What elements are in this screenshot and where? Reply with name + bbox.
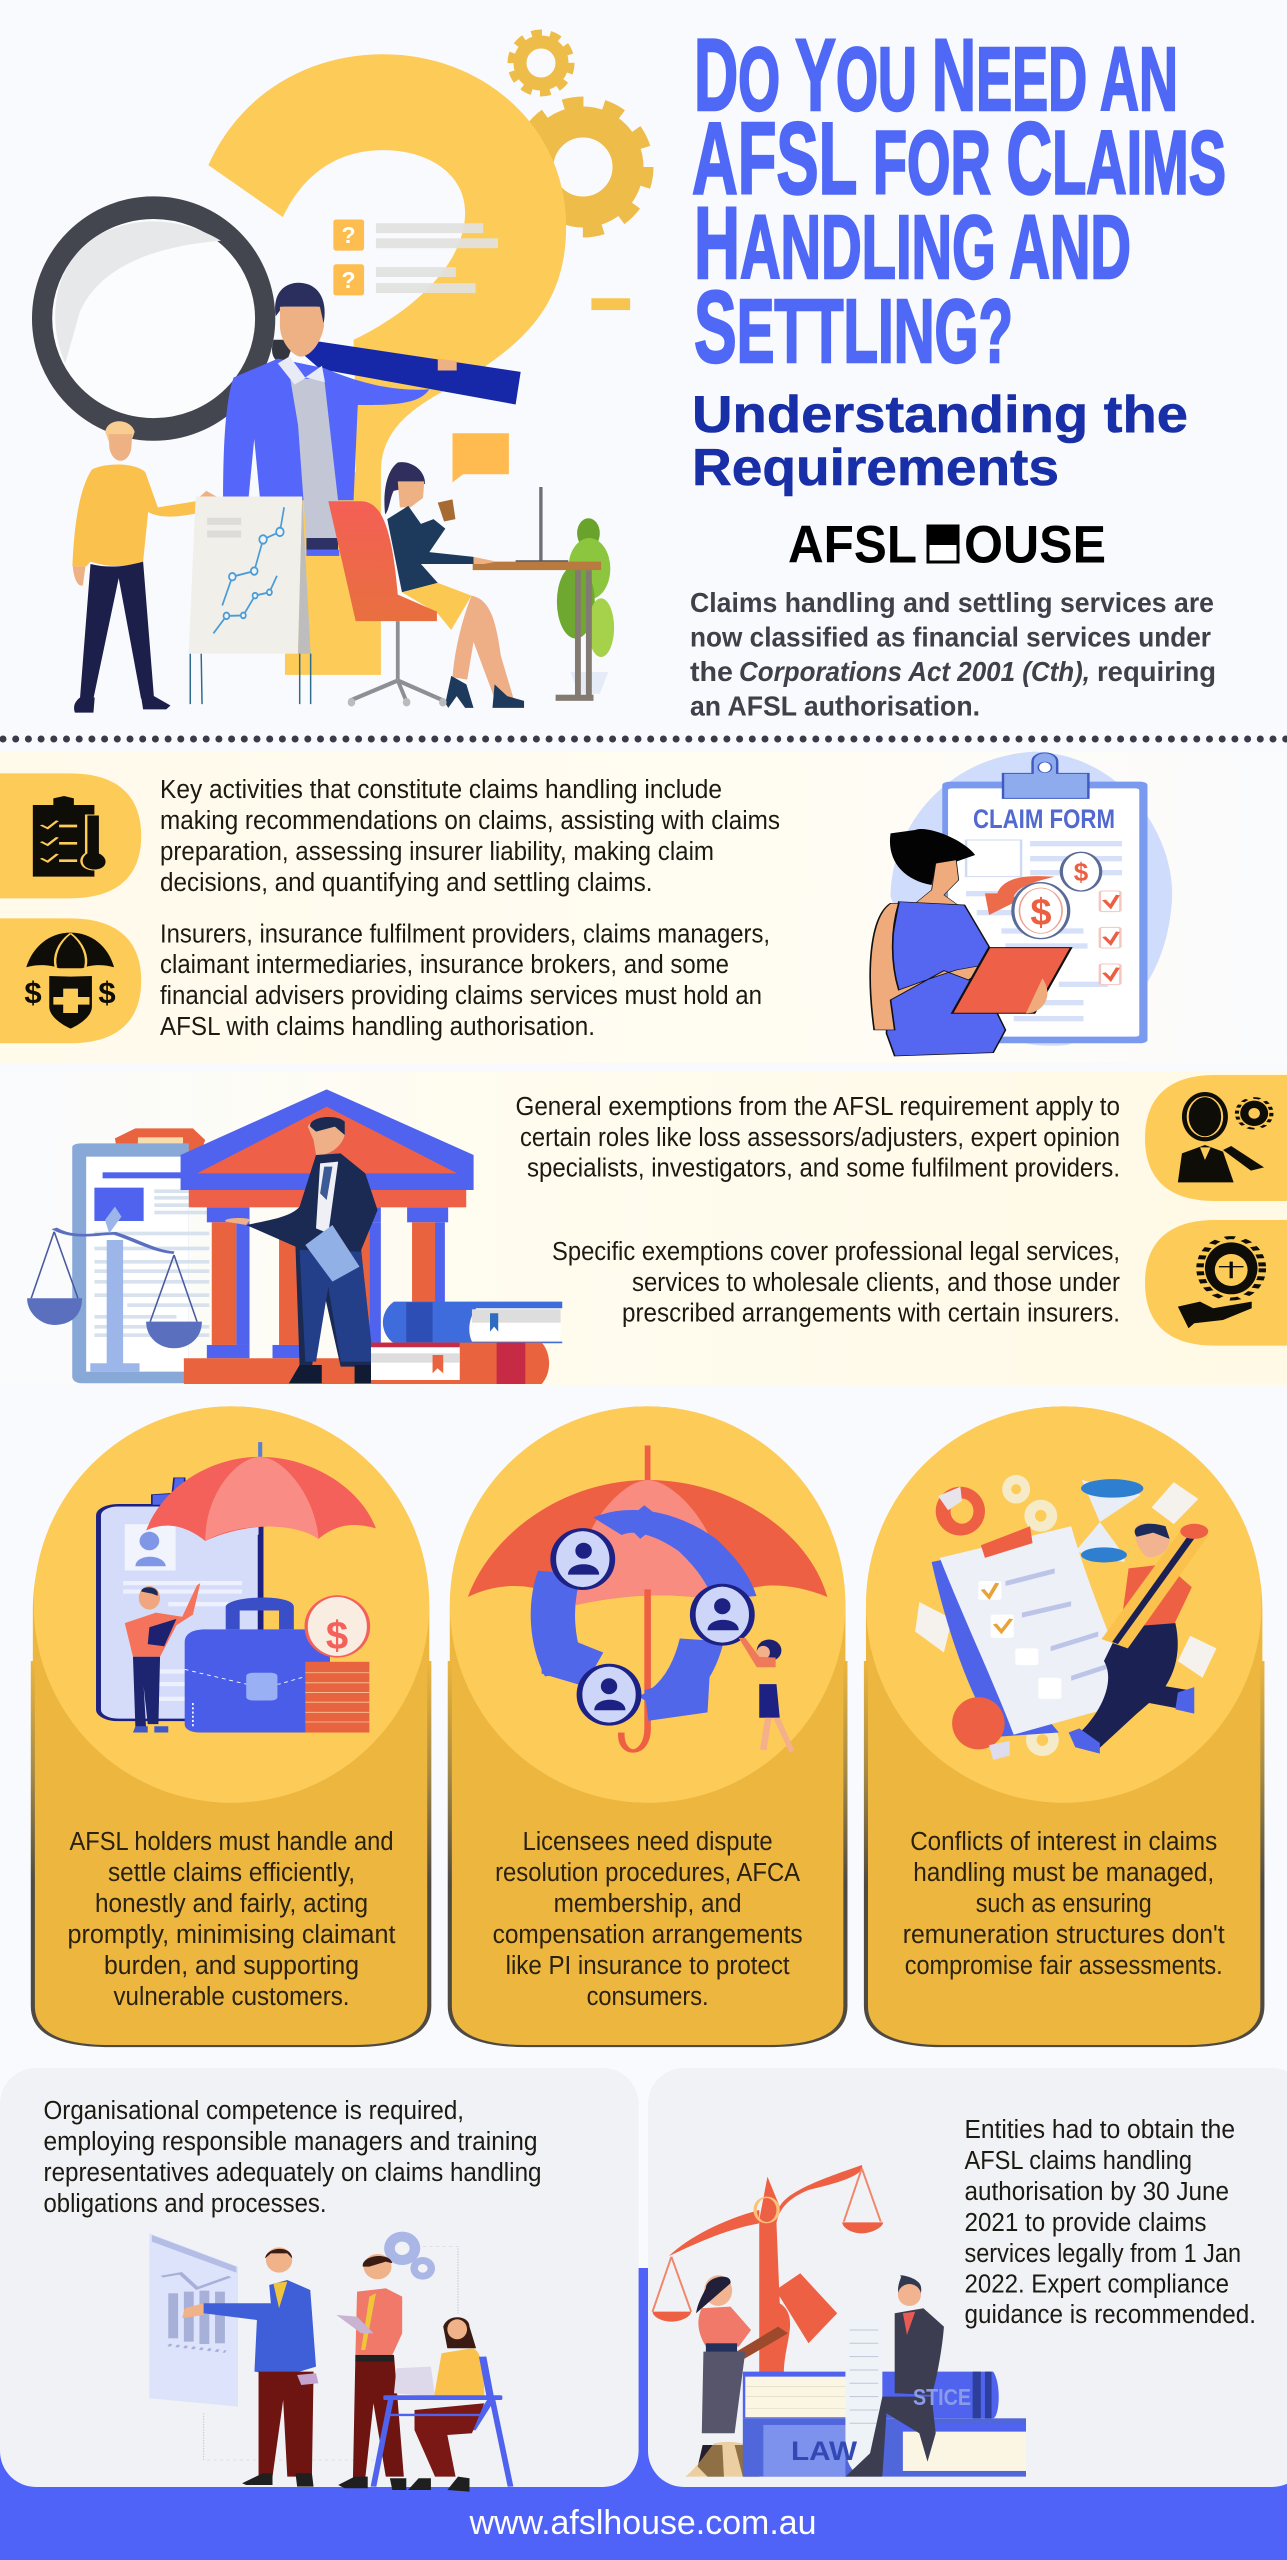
label: claim form coins: $ [1030, 892, 1052, 934]
panel: exemptions band [0, 1072, 1287, 1385]
desk with monitor [473, 487, 601, 701]
subtitle: Requirements [692, 439, 1059, 497]
icon: large gear [521, 105, 645, 229]
text: key activities: Key activities that constitute claims handling include [160, 776, 722, 804]
text: card one: burden, and supporting [104, 1952, 359, 1980]
question tile glyphs [341, 222, 356, 293]
question tile glyphs: ? [341, 267, 356, 293]
text: key activities: decisions, and quantifying and settling claims. [160, 869, 652, 897]
text: key activities: preparation, assessing insurer liability, making claim [160, 838, 714, 866]
title: SETTLING? [694, 270, 1013, 384]
label: claim form: CLAIM FORM [973, 804, 1115, 834]
text: key activities [160, 776, 780, 1041]
illustration: courthouse, scales, lawyer and books [27, 1089, 562, 1384]
plant [557, 518, 614, 694]
hero illustration: question mark, magnifier and people [42, 33, 645, 713]
text: exemptions: Specific exemptions cover professional legal services, [552, 1238, 1120, 1266]
text: card one: promptly, minimising claimant [68, 1921, 396, 1949]
text: card three: such as ensuring [976, 1890, 1152, 1918]
label: claim form coins [1030, 857, 1089, 934]
panel: organisational competence [0, 2068, 639, 2487]
central man with magnifier handle [223, 283, 521, 556]
text: exemptions: prescribed arrangements with certain insurers. [622, 1300, 1120, 1328]
question tile glyphs: ? [341, 222, 356, 248]
text: organisational competence: obligations and processes. [44, 2190, 326, 2218]
illustration: team at presentation [149, 2232, 511, 2492]
intro text: Claims handling and settling services are [690, 587, 1214, 618]
logo: AFSL House: OUSE [964, 516, 1106, 574]
intro text: an AFSL authorisation. [690, 690, 980, 722]
text: exemptions: services to wholesale clients, and those under [632, 1269, 1120, 1297]
icon: small gear [511, 33, 571, 93]
text: card one: AFSL holders must handle and [70, 1828, 394, 1856]
text: key activities: Insurers, insurance fulfilment providers, claims managers, [160, 921, 770, 949]
text: deadline: authorisation by 30 June [964, 2178, 1229, 2206]
intro text: Corporations Act 2001 (Cth), [739, 656, 1090, 687]
text: key activities: claimant intermediaries, insurance brokers, and some [160, 951, 729, 979]
text: card three [903, 1828, 1225, 1980]
text: exemptions [516, 1093, 1120, 1328]
text: deadline: 2021 to provide claims [964, 2209, 1206, 2237]
text: card two: like PI insurance to protect [506, 1952, 790, 1980]
illustration: claim form with woman [870, 752, 1172, 1056]
text: card two: resolution procedures, AFCA [495, 1859, 800, 1887]
label: shield dollar signs [24, 975, 116, 1010]
yellow dash [591, 298, 630, 310]
text: deadline: services legally from 1 Jan [964, 2240, 1241, 2268]
subtitle: Understanding the [692, 386, 1188, 444]
tab: umbrella shield icon [0, 918, 141, 1043]
seated woman with coffee [328, 462, 524, 708]
book labels: LAW [791, 2436, 858, 2466]
card: efficient handling [33, 1406, 429, 2046]
text: deadline: AFSL claims handling [964, 2147, 1192, 2175]
card: conflicts of interest [866, 1406, 1262, 2046]
text: card three: remuneration structures don't [903, 1921, 1225, 1949]
title [692, 18, 1226, 384]
tab: legal gear icon [1145, 1220, 1287, 1346]
speech bubble [452, 433, 509, 482]
tab: checklist icon [0, 773, 141, 898]
logo: AFSL House [788, 516, 1106, 574]
text: card one: vulnerable customers. [114, 1983, 350, 2011]
text: card two: consumers. [587, 1983, 709, 2011]
illustration: claim document and man with pencil [915, 1475, 1216, 1760]
question tiles [333, 219, 364, 295]
text: organisational competence: Organisational competence is required, [44, 2097, 464, 2125]
text: card three: Conflicts of interest in claims [910, 1828, 1217, 1856]
intro text: requiring [1097, 656, 1216, 687]
text: exemptions: specialists, investigators, and some fulfilment providers. [527, 1155, 1120, 1183]
text: exemptions: certain roles like loss assessors/adjusters, expert opinion [520, 1124, 1120, 1152]
label: shield dollar signs: $ [24, 975, 42, 1010]
illustration: scales of justice, gavel and law books [653, 2165, 1026, 2477]
text: key activities: AFSL with claims handling authorisation. [160, 1013, 595, 1041]
question mark [208, 54, 566, 675]
question list [376, 223, 498, 293]
footer band [0, 2268, 1287, 2560]
text: card two: Licensees need dispute [523, 1828, 773, 1856]
intro text [690, 587, 1216, 722]
text: key activities: financial advisers providing claims services must hold an [160, 982, 762, 1010]
card: dispute resolution [450, 1406, 845, 2046]
text: card two: compensation arrangements [493, 1921, 803, 1949]
tab: investigator icon [1145, 1075, 1287, 1201]
text: organisational competence: employing responsible managers and training [44, 2128, 538, 2156]
illustration: umbrella, briefcase and coin [98, 1442, 376, 1733]
label: shield dollar signs: $ [98, 975, 116, 1010]
subtitle [692, 386, 1188, 497]
text: deadline: 2022. Expert compliance [964, 2271, 1229, 2299]
text: organisational competence [44, 2097, 542, 2218]
illustration: umbrella ring of people [468, 1445, 827, 1753]
text: organisational competence: representatives adequately on claims handling [44, 2159, 542, 2187]
text: deadline [964, 2116, 1256, 2329]
book labels [791, 2384, 971, 2466]
label: claim form coins: $ [1074, 857, 1089, 887]
text: card one [68, 1828, 396, 2011]
panel: key activities band [0, 752, 1287, 1063]
intro text: now classified as financial services under [690, 622, 1211, 652]
book labels: STICE [913, 2384, 971, 2410]
text: exemptions: General exemptions from the AFSL requirement apply to [516, 1093, 1120, 1121]
icon label: coin dollar: $ [326, 1614, 348, 1658]
text: card three: handling must be managed, [913, 1859, 1214, 1887]
text: card two: membership, and [554, 1890, 742, 1918]
intro text: the [690, 656, 733, 687]
text: deadline: Entities had to obtain the [964, 2116, 1235, 2144]
panel: deadline [648, 2068, 1287, 2487]
magnifier [42, 208, 265, 429]
text: deadline: guidance is recommended. [964, 2301, 1256, 2329]
footer url: www.afslhouse.com.au [469, 2504, 816, 2542]
text: key activities: making recommendations on claims, assisting with claims [160, 807, 780, 835]
text: card three: compromise fair assessments. [905, 1952, 1223, 1980]
logo: AFSL House: AFSL [788, 516, 917, 574]
text: card one: honestly and fairly, acting [95, 1890, 368, 1918]
text: card one: settle claims efficiently, [108, 1859, 355, 1887]
flip chart [189, 496, 311, 704]
left man [72, 421, 219, 713]
text: card two [493, 1828, 803, 2011]
